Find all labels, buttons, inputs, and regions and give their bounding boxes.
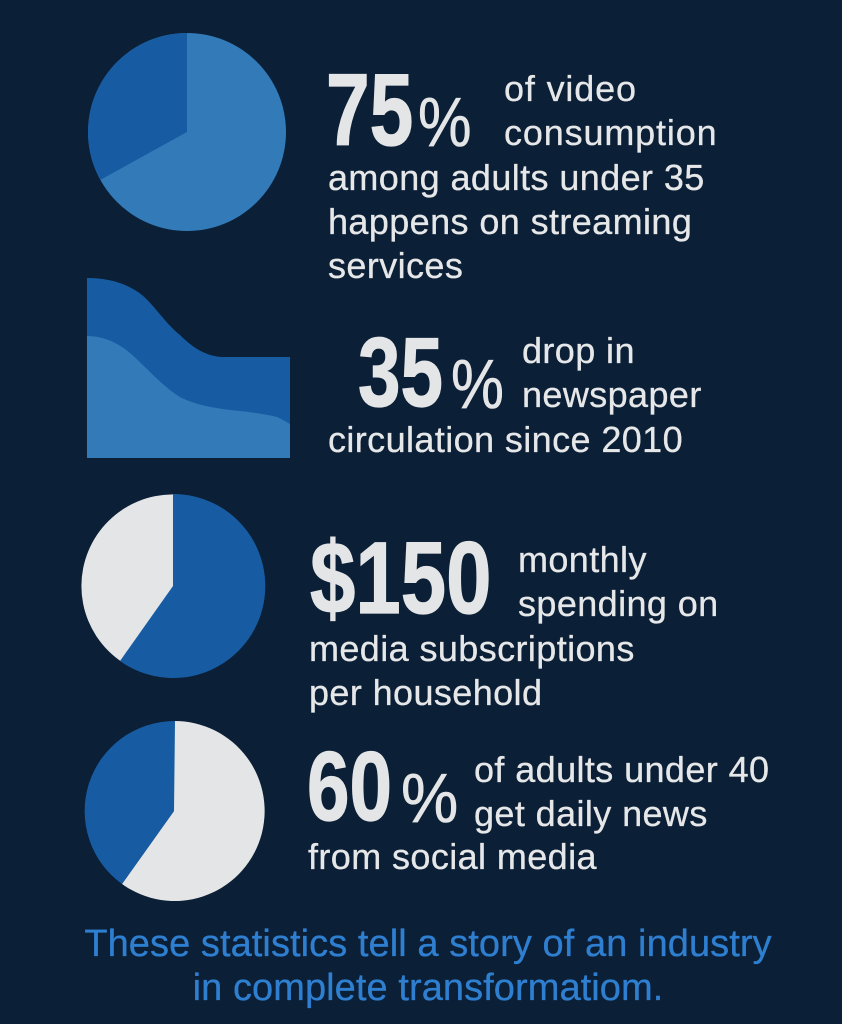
closing statement	[84, 923, 772, 1009]
stat 4 number	[307, 731, 458, 841]
stat 2 number	[358, 317, 504, 427]
stat 1 number: 75	[326, 53, 413, 167]
stat 3 number: $150	[310, 521, 492, 635]
stat 1 text continued: services	[328, 245, 463, 286]
stat 1 text continued: among adults under 35	[328, 157, 705, 198]
stat 1 text: consumption	[504, 112, 717, 153]
stat 4 number: %	[401, 759, 458, 837]
stat 2 number: 35	[358, 317, 443, 427]
stat 2 text: drop in	[522, 330, 635, 371]
stat 1 number: %	[418, 83, 472, 161]
stat 3 text: monthly	[518, 539, 647, 580]
stat 4 text: of adults under 40	[474, 749, 769, 790]
closing statement: in complete transformatiom.	[193, 967, 663, 1009]
stat 2 number: %	[451, 345, 504, 423]
stat 3 text continued: media subscriptions	[309, 628, 635, 669]
stat 1 text continued: happens on streaming	[328, 201, 692, 242]
stat 4 text: get daily news	[474, 793, 708, 834]
area chart: newspaper drop	[87, 278, 290, 458]
stat 4 text continued: from social media	[308, 836, 597, 877]
pie chart: 60% social	[85, 721, 265, 901]
stat 1 number	[326, 53, 472, 167]
stat 3 text: spending on	[518, 583, 719, 624]
pie chart: 75% video	[88, 33, 286, 231]
stat 2 text continued: circulation since 2010	[328, 419, 683, 460]
stat 3 text continued	[309, 628, 635, 713]
stat 1 text	[504, 68, 717, 153]
stat 4 text	[474, 749, 769, 834]
stat 3 text	[518, 539, 719, 624]
stat 1 text continued	[328, 157, 705, 286]
stat 3 text continued: per household	[309, 672, 542, 713]
stat 1 text: of video	[504, 68, 637, 109]
stat 2 text: newspaper	[522, 374, 702, 415]
stat 2 text	[522, 330, 702, 415]
pie chart: $150 spending	[81, 494, 265, 678]
closing statement: These statistics tell a story of an industry	[84, 923, 772, 965]
stat 4 number: 60	[307, 731, 392, 841]
